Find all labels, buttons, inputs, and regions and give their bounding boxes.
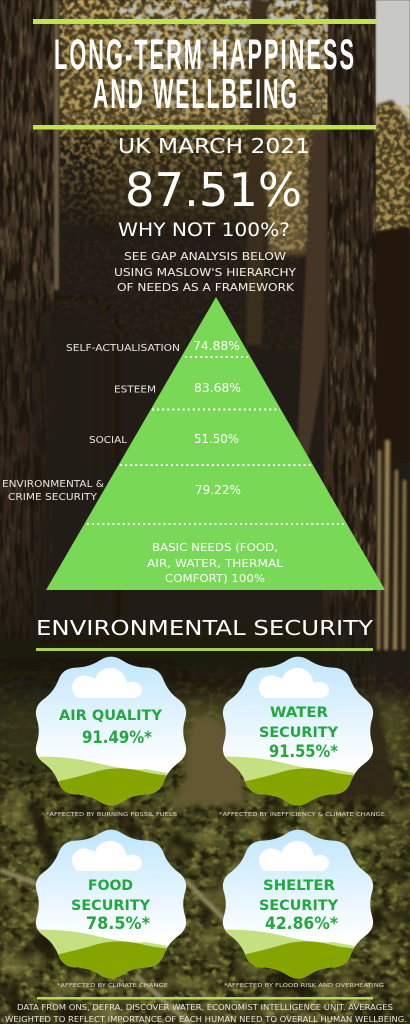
water security text: [259, 705, 338, 761]
panel: water security: [218, 651, 378, 811]
air quality text: [59, 708, 162, 747]
pyramid values: 79.22%: [195, 483, 241, 497]
air quality text: 91.49%*: [82, 728, 152, 747]
source note: DATA FROM ONS, DEFRA, DISCOVER WATER, ECONOMIST INTELLIGENCE UNIT. AVERAGES: [17, 1003, 393, 1012]
water security text: WATER: [270, 705, 328, 721]
pyramid level labels: ENVIRONMENTAL &: [2, 479, 105, 490]
basic needs text: AIR, WATER, THERMAL: [147, 558, 283, 570]
shelter security text: SHELTER: [263, 878, 335, 894]
intro text: [114, 250, 296, 294]
pyramid shape: [46, 297, 385, 590]
panel: shelter security: [218, 824, 378, 984]
pyramid level labels: CRIME SECURITY: [8, 492, 97, 503]
panel: food security: [31, 824, 191, 984]
footnote: shelter security: *AFFECTED BY FLOOD RISK AND OVERHEATING: [224, 983, 384, 989]
pyramid: Maslow's hierarchy: [2, 297, 385, 590]
water security text: 91.55%*: [269, 742, 338, 761]
food security text: FOOD: [88, 878, 133, 894]
title bar: bottom: [33, 125, 376, 130]
pyramid level labels: SELF-ACTUALISATION: [66, 343, 180, 354]
pyramid level labels: SOCIAL: [89, 435, 128, 446]
water security text: SECURITY: [259, 725, 338, 741]
footer rule: [37, 997, 373, 1000]
question heading: WHY NOT 100%?: [118, 220, 290, 241]
pyramid level labels: [2, 343, 180, 503]
pyramid values: 74.88%: [193, 339, 240, 353]
food security text: 78.5%*: [86, 914, 150, 933]
section heading: environmental security: ENVIRONMENTAL SECURITY: [36, 616, 374, 640]
intro text: OF NEEDS AS A FRAMEWORK: [117, 281, 295, 294]
panel: air quality: [31, 651, 191, 811]
footnote: air quality: *AFFECTED BY BURNING FOSSIL FUELS: [46, 812, 178, 818]
footnote: food security: *AFFECTED BY CLIMATE CHANGE: [57, 983, 169, 989]
basic needs text: [147, 542, 283, 585]
air quality text: AIR QUALITY: [59, 708, 162, 724]
title: [54, 31, 356, 117]
headline figure: 87.51%: [125, 163, 302, 217]
pyramid values: 83.68%: [194, 381, 241, 395]
pyramid values: 51.50%: [194, 432, 239, 446]
shelter security text: 42.86%*: [265, 914, 338, 933]
subtitle: date: UK MARCH 2021: [118, 134, 310, 158]
basic needs text: COMFORT) 100%: [165, 573, 265, 585]
shelter security text: [259, 878, 338, 933]
intro text: SEE GAP ANALYSIS BELOW: [124, 250, 286, 263]
section rule: [36, 648, 373, 651]
footnote: water security: *AFFECTED BY INEFFICIENCY & CLIMATE CHANGE: [219, 812, 386, 818]
pyramid values: [193, 339, 241, 497]
intro text: USING MASLOW'S HIERARCHY: [114, 266, 296, 279]
title bar: top: [33, 19, 377, 24]
shelter security text: SECURITY: [259, 898, 338, 914]
basic needs text: BASIC NEEDS (FOOD,: [152, 542, 278, 554]
pyramid level labels: ESTEEM: [114, 384, 156, 396]
source note: [5, 1003, 407, 1024]
source note: WEIGHTED TO REFLECT IMPORTANCE OF EACH HUMAN NEED TO OVERALL HUMAN WELLBEING.: [5, 1015, 407, 1024]
food security text: SECURITY: [71, 898, 150, 914]
food security text: [71, 878, 150, 933]
